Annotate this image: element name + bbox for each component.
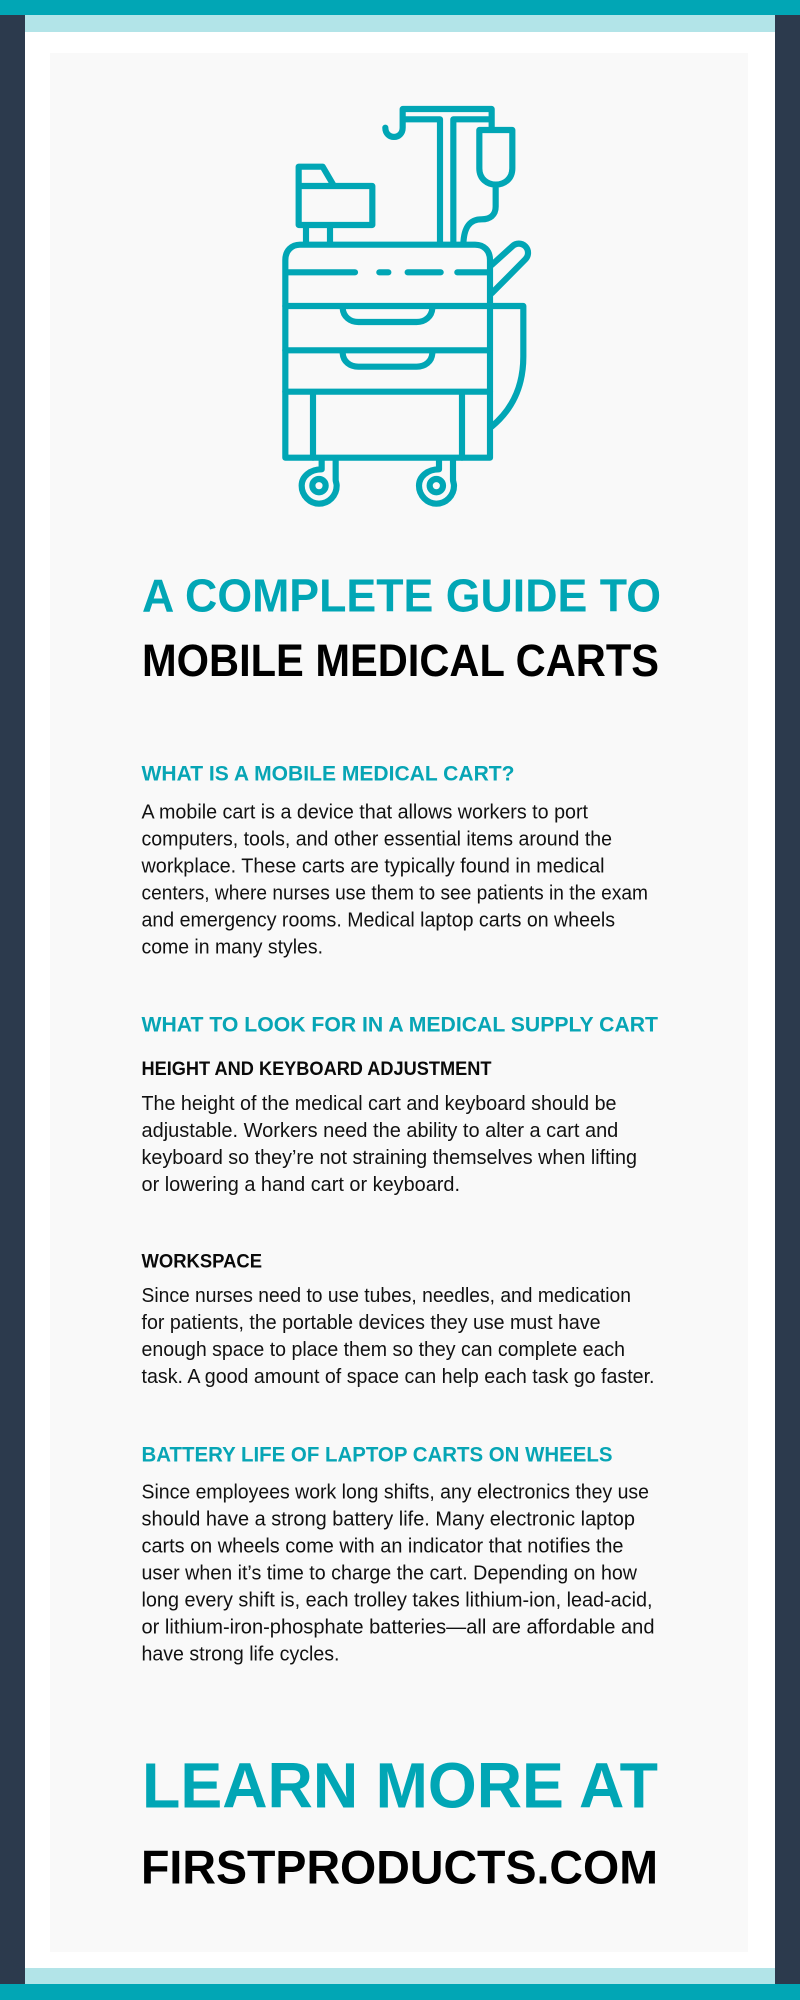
text block: have strong life cycles. [142,1643,340,1665]
icon: drawers and handles [285,306,523,458]
text block: carts on wheels come with an indicator that notifies the [142,1535,624,1557]
section: what is a mobile medical cart [141,762,648,958]
icon: IV pole and hook [385,109,492,244]
text block: Since nurses need to use tubes, needles, and medication [142,1285,631,1307]
heading: WHAT TO LOOK FOR IN A MEDICAL SUPPLY CART [142,1013,658,1037]
section: what to look for [142,1013,658,1388]
icon: side handle [492,244,528,293]
icon: cart body [285,245,490,458]
text block [142,1481,654,1665]
icon: mobile medical cart [285,109,528,504]
text block: long every shift is, each trolley takes lithium-ion, lead-acid, [142,1589,652,1611]
text block: user when it’s time to charge the cart. Depending on how [142,1562,638,1584]
text block: come in many styles. [142,936,323,958]
title: MOBILE MEDICAL CARTS [142,635,659,686]
icon: right wheel [419,460,454,504]
section: battery life [142,1443,654,1665]
text block: workplace. These carts are typically found in medical [141,855,604,877]
call to action: FIRSTPRODUCTS.COM [141,1841,658,1894]
text block: or lowering a hand cart or keyboard. [142,1174,460,1196]
text block: for patients, the portable devices they use must have [142,1312,600,1334]
call to action: LEARN MORE AT [142,1750,658,1822]
subheading: workspace: WORKSPACE [142,1251,262,1273]
text block: should have a strong battery life. Many electronic laptop [142,1508,635,1530]
text block: or lithium-iron-phosphate batteries—all are affordable and [142,1616,654,1638]
subheading: height and keyboard adjustment: HEIGHT AND KEYBOARD ADJUSTMENT [142,1058,492,1080]
title: A COMPLETE GUIDE TO [142,570,661,622]
text block [141,801,648,958]
heading: WHAT IS A MOBILE MEDICAL CART? [142,762,514,786]
icon: left wheel [302,460,337,504]
text block: task. A good amount of space can help each task go faster. [142,1366,654,1388]
text block: and emergency rooms. Medical laptop carts on wheels [142,909,615,931]
text block: enough space to place them so they can complete each [142,1339,625,1361]
icon: IV bag and tube [463,130,512,244]
title [142,570,661,686]
text block: centers, where nurses use them to see patients in the exam [142,882,648,904]
icon: monitor [299,167,372,244]
text block: A mobile cart is a device that allows workers to port [142,801,588,823]
call to action [141,1750,658,1894]
text block [142,1285,654,1388]
text block: adjustable. Workers need the ability to alter a cart and [142,1120,618,1142]
text block [142,1093,637,1196]
heading: BATTERY LIFE OF LAPTOP CARTS ON WHEELS [142,1443,612,1467]
text block: keyboard so they’re not straining themselves when lifting [142,1147,637,1169]
text block: The height of the medical cart and keyboard should be [142,1093,616,1115]
text block: computers, tools, and other essential items around the [142,828,612,850]
text block: Since employees work long shifts, any electronics they use [142,1481,649,1503]
icon: dashed shelf line [288,263,487,282]
